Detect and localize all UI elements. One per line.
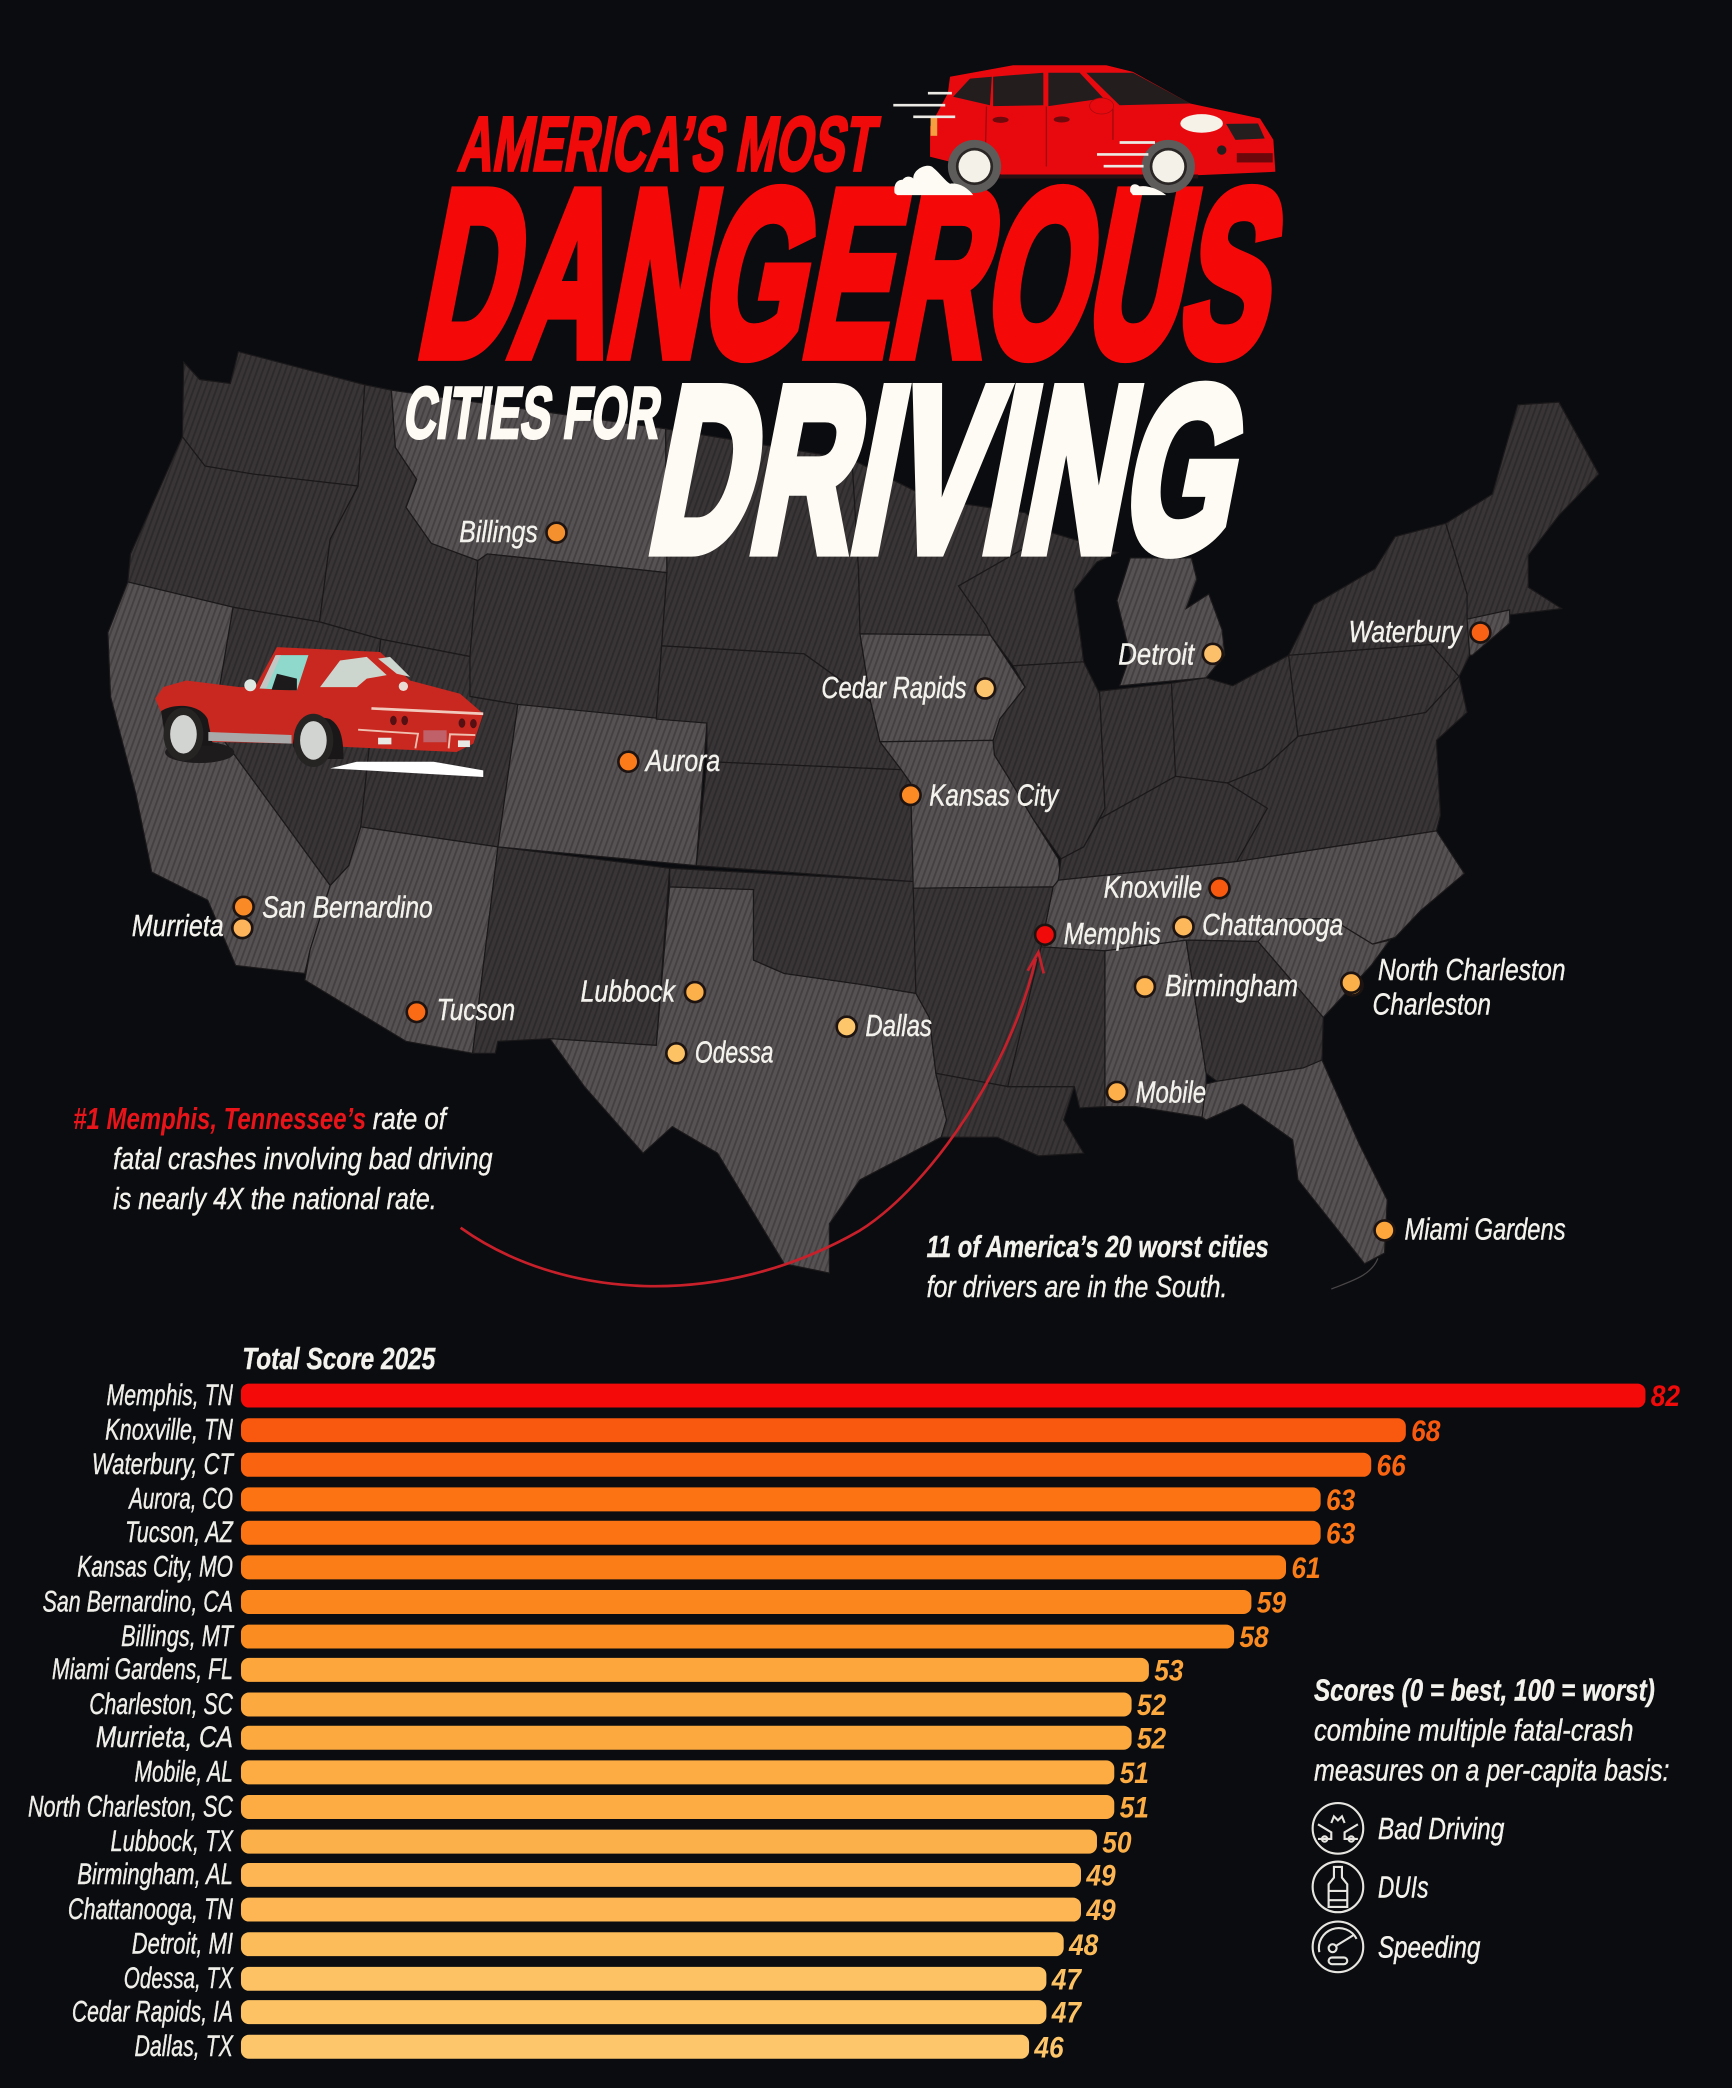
callout: South cities: [927, 1230, 1269, 1304]
marker: Memphis: [1035, 917, 1161, 951]
bar: Lubbock 50: 50: [1102, 1826, 1132, 1859]
bar: Waterbury 66: Waterbury, CT: [92, 1448, 235, 1481]
bar: North Charleston 51: North Charleston, SC: [28, 1790, 234, 1823]
state: Wyoming: [470, 554, 667, 719]
callout arrow to Memphis: [461, 952, 1044, 1286]
title line: Driving: DRIVING: [635, 339, 1267, 600]
bar: Waterbury 66: 66: [1377, 1449, 1406, 1482]
state: Oklahoma: [670, 868, 916, 993]
state: Arkansas: [913, 887, 1053, 1087]
state: Mississippi: [1008, 947, 1105, 1108]
bar: Knoxville 68: 68: [1411, 1415, 1441, 1448]
marker: Knoxville: Knoxville: [1104, 871, 1202, 905]
state: Missouri: [880, 740, 1061, 888]
bar: Birmingham 49: 49: [1085, 1860, 1116, 1893]
state: New Mexico: [473, 847, 670, 1053]
state: Nevada: [213, 607, 381, 886]
state: Michigan: [1117, 558, 1225, 686]
bar: Miami Gardens 53: Miami Gardens, FL: [52, 1653, 233, 1686]
bar: Billings 58: [121, 1620, 1269, 1654]
state: Utah: [361, 639, 518, 847]
bar: Cedar Rapids 47: Cedar Rapids, IA: [72, 1995, 233, 2028]
state: Texas: [550, 887, 947, 1273]
marker: Chattanooga: Chattanooga: [1202, 908, 1343, 942]
state: Indiana: [1100, 683, 1176, 819]
wheels: [163, 708, 203, 761]
bar: Chattanooga 49: 49: [1085, 1894, 1116, 1927]
state: Louisiana: [936, 1073, 1084, 1156]
state: Tennessee and North Carolina: [1041, 831, 1464, 951]
marker: Billings: Billings: [459, 515, 538, 549]
bar: San Bernardino 59: San Bernardino, CA: [43, 1585, 233, 1618]
marker: Kansas City: [901, 779, 1060, 813]
marker: North Charleston and Charleston: [1341, 953, 1566, 1022]
state: Wisconsin: [959, 533, 1118, 666]
marker: Birmingham: [1135, 969, 1298, 1003]
callout: Memphis rate: is nearly 4X the national rate.: [113, 1182, 437, 1216]
bar: Memphis 82: Memphis, TN: [107, 1379, 234, 1412]
marker: Miami Gardens: [1375, 1213, 1566, 1247]
icon: bad driving: [1313, 1803, 1363, 1854]
state: Illinois: [993, 662, 1105, 859]
bar: Miami Gardens 53: [52, 1653, 1184, 1688]
state: Minnesota: [852, 459, 1052, 635]
bar: Knoxville 68: Knoxville, TN: [105, 1413, 234, 1446]
marker: Mobile: Mobile: [1136, 1076, 1206, 1110]
legend intro text: [1314, 1673, 1669, 1787]
bar: North Charleston 51: [28, 1790, 1149, 1825]
bar: Memphis 82: [107, 1379, 1680, 1413]
state: Iowa: [860, 634, 1025, 742]
bar: Mobile 51: Mobile, AL: [134, 1756, 233, 1789]
marker: Kansas City: Kansas City: [929, 779, 1060, 813]
callout: South cities: for drivers are in the South.: [927, 1270, 1227, 1304]
marker: San Bernardino: San Bernardino: [262, 890, 433, 924]
label: Bad Driving: Bad Driving: [1378, 1812, 1504, 1846]
marker: Mobile: [1107, 1076, 1206, 1110]
marker: North Charleston and Charleston: North Charleston: [1378, 953, 1566, 987]
bar: Odessa 47: [124, 1962, 1083, 1996]
marker: Lubbock: Lubbock: [580, 974, 676, 1008]
bar: Detroit 48: 48: [1068, 1929, 1099, 1962]
marker: Birmingham: Birmingham: [1165, 969, 1298, 1003]
state: Kentucky: [1058, 776, 1267, 880]
bar: Dallas 46: 46: [1034, 2031, 1064, 2064]
bar: Cedar Rapids 47: [72, 1995, 1083, 2030]
bar: Odessa 47: Odessa, TX: [124, 1962, 234, 1995]
bar: Murrieta 52: 52: [1137, 1722, 1166, 1755]
windows: [953, 77, 992, 105]
marker: Chattanooga: [1174, 908, 1343, 942]
state: Montana: [391, 390, 667, 573]
state: Virginia and mid-Atlantic: [1227, 676, 1467, 862]
state: Georgia: [1186, 940, 1323, 1081]
map: United States: [108, 352, 1599, 1289]
state: Florida Keys: [1331, 1258, 1378, 1289]
bar: Mobile 51: [134, 1756, 1149, 1790]
marker: Cedar Rapids: Cedar Rapids: [821, 671, 967, 705]
state: Connecticut: [1467, 610, 1510, 655]
bar: San Bernardino 59: [43, 1585, 1287, 1620]
bar chart: total score 2025: [28, 1342, 1680, 2064]
bar: Billings 58: Billings, MT: [121, 1620, 235, 1653]
icon: bottle for DUIs: [1313, 1862, 1363, 1912]
bar: Aurora 63: [128, 1483, 1355, 1517]
state: Idaho: [320, 385, 478, 656]
state: Ohio: [1172, 655, 1298, 783]
state: New England: [1446, 402, 1599, 619]
legend intro text: combine multiple fatal-crash: [1314, 1713, 1633, 1747]
state: Arizona: [305, 827, 498, 1053]
title line: Cities for: CITIES FOR: [400, 371, 667, 454]
bar: Charleston 52: 52: [1137, 1689, 1166, 1722]
bar: Dallas 46: Dallas, TX: [134, 2030, 234, 2063]
state: North Dakota and South Dakota: [662, 429, 871, 702]
state: California: [108, 582, 330, 973]
marker: Aurora: Aurora: [644, 744, 720, 778]
bar: Billings 58: 58: [1239, 1621, 1269, 1654]
callout: Memphis rate: fatal crashes involving bad driving: [113, 1142, 493, 1176]
bar: Murrieta 52: Murrieta, CA: [96, 1721, 233, 1754]
bar: Chattanooga 49: Chattanooga, TN: [68, 1893, 234, 1926]
bar: Charleston 52: Charleston, SC: [89, 1688, 234, 1721]
icon: speedometer: [1313, 1922, 1363, 1972]
bar: Cedar Rapids 47: 47: [1051, 1997, 1083, 2030]
bar: Tucson 63: 63: [1326, 1517, 1355, 1550]
state: Washington: [182, 352, 365, 486]
bar: Lubbock 50: Lubbock, TX: [110, 1825, 234, 1858]
state: Oregon: [128, 437, 358, 622]
bar: Knoxville 68: [105, 1413, 1441, 1448]
bar: San Bernardino 59: 59: [1257, 1587, 1287, 1620]
bar: Kansas City 61: 61: [1291, 1552, 1321, 1585]
bar: North Charleston 51: 51: [1120, 1792, 1149, 1825]
bar: Tucson 63: Tucson, AZ: [125, 1516, 234, 1549]
state: South Carolina: [1258, 919, 1390, 1017]
marker: Memphis: Memphis: [1064, 917, 1161, 951]
speed lines: [893, 93, 1155, 166]
marker: Dallas: [837, 1009, 932, 1043]
marker: North Charleston and Charleston: Charleston: [1373, 988, 1491, 1022]
wheels: [948, 140, 1001, 193]
bar: Charleston 52: [89, 1688, 1166, 1722]
state: Nebraska: [656, 646, 901, 770]
marker: Detroit: Detroit: [1118, 637, 1195, 671]
marker: Aurora: [618, 744, 720, 778]
marker: Tucson: Tucson: [437, 993, 515, 1027]
bar: Waterbury 66: [92, 1448, 1406, 1482]
marker: Odessa: Odessa: [695, 1036, 773, 1070]
callout: Memphis rate: rate of: [373, 1102, 449, 1136]
marker: Miami Gardens: Miami Gardens: [1405, 1213, 1566, 1247]
bar: Kansas City 61: Kansas City, MO: [77, 1551, 233, 1584]
bar: Dallas 46: [134, 2030, 1064, 2064]
bar: Birmingham 49: [77, 1858, 1116, 1893]
bar: Aurora 63: 63: [1326, 1484, 1355, 1517]
marker: Tucson: [407, 993, 515, 1027]
marker: Odessa: [666, 1036, 773, 1070]
state: Pennsylvania: [1289, 645, 1459, 736]
callout: Memphis rate: #1 Memphis, Tennessee’s: [73, 1102, 366, 1136]
label: DUIs: DUIs: [1378, 1871, 1428, 1905]
label: Speeding: Speeding: [1378, 1930, 1480, 1965]
city markers: [132, 515, 1566, 1247]
chart heading: Total Score 2025: [242, 1342, 436, 1376]
exhaust clouds: [894, 166, 973, 195]
marker: Murrieta: Murrieta: [132, 909, 224, 943]
bar: Mobile 51: 51: [1120, 1757, 1149, 1790]
callout: Memphis rate: [73, 1102, 493, 1216]
bar: Chattanooga 49: [68, 1893, 1116, 1927]
bar: Aurora 63: Aurora, CO: [128, 1483, 233, 1516]
bar: Lubbock 50: [110, 1825, 1132, 1859]
legend: score explanation: [1313, 1673, 1669, 1972]
state: New York: [1289, 523, 1470, 676]
title line: America's Most: AMERICA’S MOST: [454, 102, 884, 187]
marker: Dallas: Dallas: [865, 1009, 932, 1043]
state: Kansas: [696, 762, 913, 882]
bar: Detroit 48: Detroit, MI: [132, 1928, 233, 1961]
bar: Tucson 63: [125, 1516, 1355, 1550]
state: Florida: [1202, 1060, 1387, 1264]
bar: Kansas City 61: [77, 1551, 1321, 1585]
legend intro text: Scores (0 = best, 100 = worst): [1314, 1673, 1655, 1707]
bar: Murrieta 52: [96, 1721, 1166, 1755]
bar: Odessa 47: 47: [1051, 1963, 1083, 1996]
icon: red hatchback car: [893, 65, 1275, 195]
state: Colorado: [498, 704, 707, 866]
icon: red classic sports car: [155, 647, 483, 777]
marker: Waterbury: Waterbury: [1349, 615, 1463, 649]
bar: Miami Gardens 53: 53: [1154, 1655, 1184, 1688]
title: [400, 102, 1303, 600]
bar: Memphis 82: 82: [1651, 1380, 1680, 1413]
callout: South cities: 11 of America’s 20 worst cities: [927, 1230, 1269, 1264]
state: Alabama: [1105, 940, 1206, 1117]
bar: Birmingham 49: Birmingham, AL: [77, 1858, 233, 1891]
bar: Detroit 48: [132, 1928, 1099, 1962]
